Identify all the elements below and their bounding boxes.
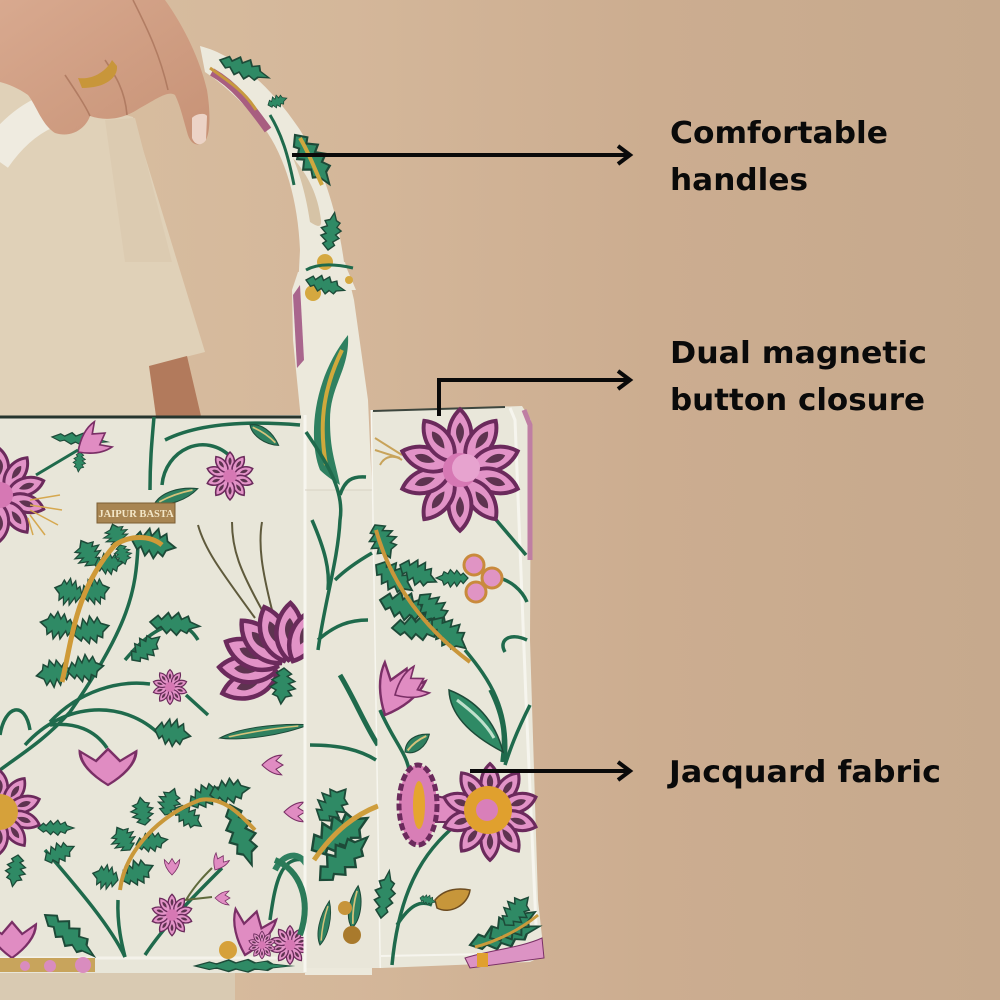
handle: right arc [200,46,356,290]
three petal flower [436,555,502,602]
brand plate [97,503,175,523]
strap stems [306,432,378,760]
small pink buds [262,731,314,822]
bag side panel [372,406,544,968]
gold-green leaf [371,869,399,920]
corner fern [467,889,543,957]
fingernail [192,114,207,144]
big rosette at closure [399,409,521,531]
callout arrow: jacquard fabric [470,762,630,780]
green bud [153,716,193,749]
leaf [401,730,434,756]
lotus bud [365,659,431,724]
flower: pink top [206,452,254,500]
callout label: comfortable handles [670,116,888,198]
curl stem [275,856,310,875]
feather leaf [124,610,201,668]
callout label: magnetic closure [670,336,927,418]
large flower with gold centre [441,764,539,860]
lotus bud lower left [80,749,136,785]
callout arrow: magnetic closure [439,371,630,416]
trumpet flower [399,765,488,845]
small star flower and buds [151,852,230,936]
fern: upper left [34,520,178,690]
shirt and sleeve [0,80,235,1000]
bag front panel [0,415,306,973]
forearm [149,356,201,416]
callout label: comfortable handles: Comfortable [670,116,888,151]
callout label: magnetic closure: button closure [670,383,925,418]
long leaf [219,721,310,742]
strap lower sprigs [275,860,365,946]
callout label: magnetic closure: Dual magnetic [670,336,927,371]
gusset strap lower section [275,410,381,972]
left flower with gold centre [0,771,78,888]
side panel floral print [363,409,544,968]
fern: side panel [363,519,475,662]
ring [78,60,117,88]
callout label: jacquard fabric: Jacquard fabric [667,755,941,790]
bottom plume [219,906,309,964]
gold bud [419,889,470,910]
stamens [28,495,62,535]
stamens [375,438,402,465]
front panel floral print [0,417,328,973]
fern on strap [302,779,378,891]
stems [0,417,305,957]
fern: lower [90,775,265,893]
leaves: top right [153,419,281,507]
large green leaf [449,690,503,752]
corner band [465,938,544,968]
stems [380,515,530,965]
handle: left side [0,112,46,158]
small pink flower [152,670,188,704]
callout arrow: comfortable handles [292,146,630,164]
flower: left rosette [0,449,46,541]
handle strap [292,254,372,975]
lotus flower [218,603,328,706]
callout label: comfortable handles: handles [670,163,808,198]
hand holding the handle [0,0,209,144]
bottom left flower [0,906,102,964]
brand plate: JAIPUR BASTA [98,509,174,520]
flower: top bud [36,420,114,475]
bottom band [0,957,291,973]
